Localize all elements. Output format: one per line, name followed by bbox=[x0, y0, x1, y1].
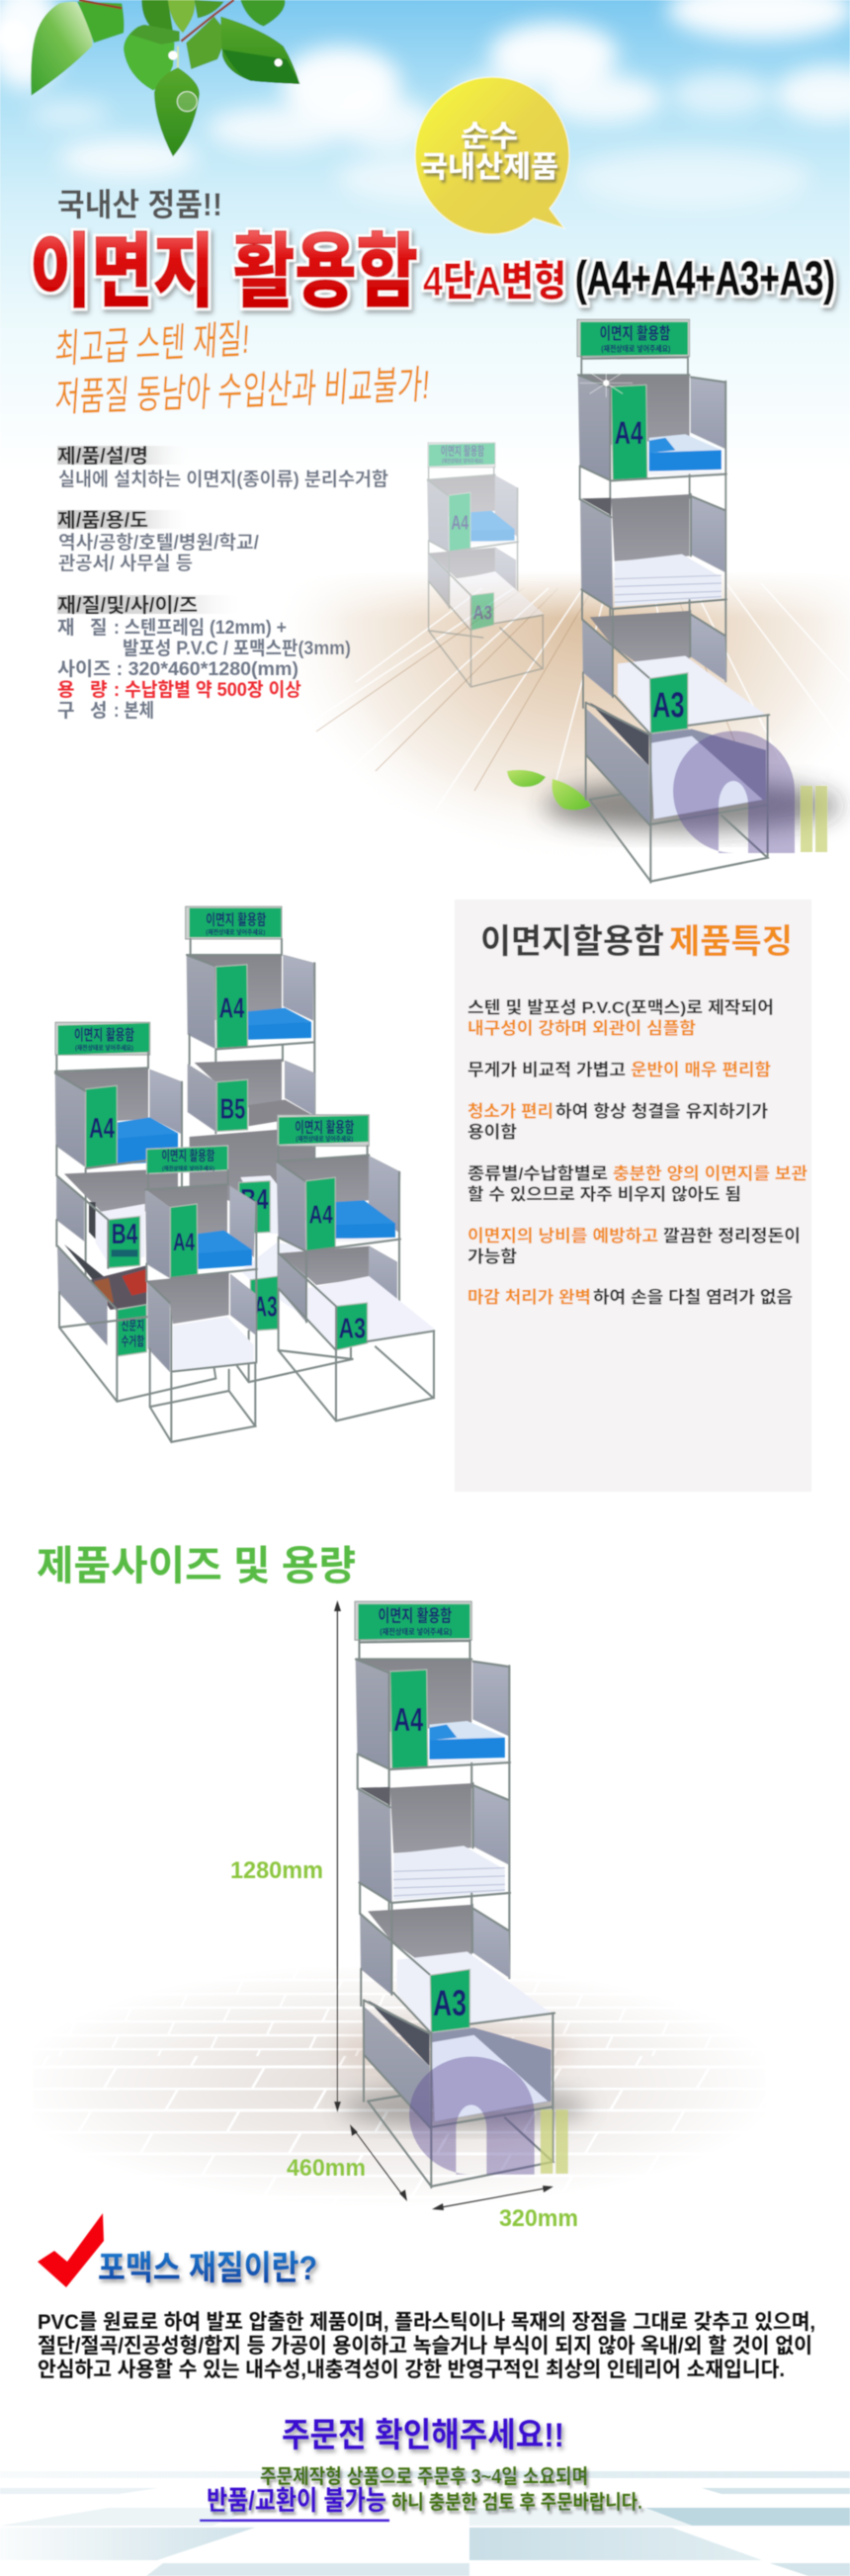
icon: main four-tier rack: 이면지 활용함 bbox=[600, 324, 671, 343]
text block: feature list: 가능함 bbox=[468, 1247, 517, 1266]
text block: feature list: 충분한 양의 이면지를 보관 bbox=[613, 1164, 808, 1183]
icon: ghosted two-tier rack: A4 bbox=[451, 512, 468, 535]
text block: material and size: : 수납함별 약 500장 이상 bbox=[114, 679, 301, 701]
text block: order notice bbox=[200, 2465, 642, 2522]
icon: front two-tier rack: (재전상태로 넣어주세요) bbox=[162, 1164, 214, 1172]
icon: left tall rack: A4 bbox=[89, 1112, 115, 1144]
text block: Formex description: PVC를 원료로 하여 발포 압출한 제품이며, 플라스틱이나 목재의 장점을 그대로 갖추고 있으며, bbox=[38, 2311, 815, 2334]
icon: ghosted two-tier rack bbox=[427, 443, 544, 687]
heading: what is Formex: 포맥스 재질이란? bbox=[98, 2250, 317, 2287]
text block: material and size: 사이즈 : 320*460*1280(mm) bbox=[57, 658, 298, 680]
text block: feature list: 마감 처리가 완벽 bbox=[468, 1288, 591, 1307]
icon: main four-tier rack: A4 bbox=[615, 415, 643, 451]
text block: feature list: 깔끔한 정리정돈이 bbox=[663, 1227, 801, 1245]
icon: back tall rack: 이면지 활용함 bbox=[206, 911, 266, 929]
icon: ghosted two-tier rack: A3 bbox=[472, 602, 492, 625]
icon: front two-tier rack: A4 bbox=[173, 1229, 195, 1256]
icon: back tall rack: A3 bbox=[254, 1291, 278, 1323]
heading: features title bbox=[480, 923, 793, 961]
watermark: purple logo over hero rack bbox=[673, 731, 827, 853]
heading: please check before ordering: 주문전 확인해주세요!! bbox=[282, 2417, 564, 2454]
title: main product name: 이면지 활용함 bbox=[30, 227, 418, 317]
icon: red check mark bbox=[38, 2213, 104, 2287]
callout: yellow speech bubble with domestic product label: 순수 bbox=[461, 121, 518, 153]
icon: ghosted two-tier rack: 이면지 활용함 bbox=[441, 444, 484, 459]
text block: product uses: 제/품/용/도 bbox=[57, 509, 148, 532]
text block: feature list: 이면지의 낭비를 예방하고 bbox=[468, 1227, 658, 1245]
icon: main four-tier rack: (재전상태로 넣어주세요) bbox=[601, 343, 671, 353]
heading: features title: 제품특징 bbox=[669, 923, 793, 961]
text block: order notice: 반품/교환이 불가능 bbox=[207, 2486, 386, 2516]
icon: dimensioned four-tier rack: (재전상태로 넣어주세요) bbox=[380, 1626, 452, 1637]
text block: product description: 제/품/설/명 bbox=[57, 445, 148, 468]
text block: Formex description: 절단/절곡/진공성형/합지 등 가공이 용이하고 녹슬거나 부식이 되지 않아 옥내/외 할 것이 없이 bbox=[38, 2335, 812, 2358]
panel: product features bbox=[455, 900, 811, 1492]
text block: width label: 320mm bbox=[499, 2205, 578, 2232]
text block: material and size: 재 bbox=[57, 617, 74, 639]
icon: dimensioned four-tier rack bbox=[355, 1601, 554, 2188]
text block: material and size: 구 bbox=[57, 701, 74, 722]
panel: sky and wood floor hero background bbox=[0, 0, 850, 890]
icon: small green leaves on floor bbox=[507, 770, 591, 810]
text block: product uses: 관공서/ 사무실 등 bbox=[58, 553, 193, 574]
watermark: purple logo over size rack bbox=[409, 2057, 568, 2175]
icon: right two-tier rack: A4 bbox=[309, 1201, 333, 1230]
icon: main four-tier rack: A3 bbox=[652, 687, 685, 726]
text block: material and size: 용 bbox=[57, 680, 74, 701]
icon: left tall rack: 이면지 활용함 bbox=[74, 1026, 134, 1044]
icon: ghosted two-tier rack: (재전상태로 넣어주세요) bbox=[442, 457, 483, 465]
heading: features title: 이면지할용함 bbox=[480, 923, 664, 961]
icon: right two-tier rack: (재전상태로 넣어주세요) bbox=[296, 1135, 353, 1143]
text block: depth label: 460mm bbox=[287, 2155, 366, 2182]
arrow: width dimension bbox=[432, 2186, 553, 2210]
icon: left tall rack bbox=[55, 1022, 215, 1402]
panel: brick floor background bbox=[81, 1976, 710, 2200]
text block: feature list: 하여 항상 청결을 유지하기가 bbox=[555, 1102, 768, 1121]
text block: material and size: 질 bbox=[90, 617, 107, 639]
text block: feature list: 하여 손을 다칠 염려가 없음 bbox=[593, 1288, 793, 1307]
text block: order notice: 하니 충분한 검토 후 주문바랍니다. bbox=[391, 2491, 642, 2514]
text block: feature list: 운반이 매우 편리함 bbox=[631, 1061, 771, 1079]
icon: left tall rack: 신문지 bbox=[122, 1319, 144, 1333]
icon: back tall rack: (재전상태로 넣어주세요) bbox=[206, 928, 265, 936]
heading: product size and capacity: 제품사이즈 및 용량 bbox=[37, 1543, 356, 1589]
text block: feature list: 스텐 및 발포성 P.V.C(포맥스)로 제작되어 bbox=[468, 998, 774, 1017]
text block: material and size: : 본체 bbox=[114, 700, 154, 722]
arrow: height dimension bbox=[334, 1600, 341, 2112]
text block: feature list: 내구성이 강하며 외관이 심플함 bbox=[468, 1019, 696, 1038]
text block: material and size: 성 bbox=[90, 700, 107, 722]
text block: handwritten orange slogan bbox=[53, 318, 431, 420]
title: main product name: 4단A변형 bbox=[423, 258, 566, 304]
icon: left tall rack: B4 bbox=[112, 1218, 138, 1249]
icon: back tall rack: B5 bbox=[220, 1093, 245, 1125]
callout: yellow speech bubble with domestic product label: 국내산제품 bbox=[420, 151, 558, 184]
text block: height label: 1280mm bbox=[230, 1857, 323, 1884]
text block: product description bbox=[57, 445, 388, 490]
text block: product description: 실내에 설치하는 이면지(종이류) 분리수거함 bbox=[58, 469, 388, 490]
text block: material and size: 량 bbox=[90, 679, 107, 701]
icon: back tall rack: B4 bbox=[240, 1183, 269, 1215]
text block: Formex description bbox=[38, 2311, 815, 2381]
text block: product uses bbox=[57, 509, 260, 574]
icon: front two-tier rack: 이면지 활용함 bbox=[161, 1149, 214, 1163]
icon: left tall rack: 수거함 bbox=[122, 1333, 144, 1349]
icon: front two-tier rack bbox=[145, 1146, 257, 1442]
chart: group of product line-up racks bbox=[55, 906, 435, 1442]
icon: right two-tier rack bbox=[277, 1115, 435, 1420]
text block: feature list: 청소가 편리 bbox=[468, 1102, 553, 1121]
title: main product name bbox=[30, 227, 835, 317]
callout: yellow speech bubble with domestic product label bbox=[415, 77, 569, 234]
text block: handwritten orange slogan: 저품질 동남아 수입산과 비교불가! bbox=[53, 364, 431, 420]
text block: product uses: 역사/공항/호텔/병원/학교/ bbox=[58, 532, 260, 554]
text block: Formex description: 안심하고 사용할 수 있는 내수성,내충격성이 강한 반영구적인 최상의 인테리어 소재입니다. bbox=[38, 2359, 785, 2381]
text block: material and size bbox=[57, 594, 351, 722]
icon: checked tile floor bbox=[0, 2471, 850, 2576]
icon: main four-tier rack bbox=[577, 319, 769, 883]
icon: left tall rack: (재전상태로 넣어주세요) bbox=[75, 1044, 133, 1052]
heading: domestic genuine product: 국내산 정품!! bbox=[57, 187, 222, 222]
icon: dimensioned four-tier rack: A4 bbox=[393, 1701, 423, 1738]
arrow: depth dimension bbox=[350, 2124, 407, 2201]
icon: back tall rack: A4 bbox=[219, 991, 245, 1023]
text block: feature list: 종류별/수납함별로 bbox=[468, 1164, 608, 1183]
text block: feature list: 무게가 비교적 가볍고 bbox=[468, 1061, 626, 1079]
text block: feature list: 용이함 bbox=[468, 1123, 517, 1142]
text block: order notice: 주문제작형 상품으로 주문후 3~4일 소요되며 bbox=[260, 2465, 588, 2488]
icon: right two-tier rack: 이면지 활용함 bbox=[295, 1119, 354, 1137]
text block: material and size: 재/질/및/사/이/즈 bbox=[57, 594, 198, 617]
text block: handwritten orange slogan: 최고급 스텐 재질! bbox=[54, 318, 251, 372]
text block: feature list bbox=[468, 998, 808, 1307]
icon: leafy branch with water drop bbox=[0, 0, 299, 156]
text block: material and size: : 스텐프레임 (12mm) + bbox=[114, 617, 287, 639]
icon: dimensioned four-tier rack: A3 bbox=[433, 1982, 467, 2023]
icon: dimensioned four-tier rack: 이면지 활용함 bbox=[379, 1606, 452, 1626]
text block: feature list: 할 수 있으므로 자주 비우지 않아도 됨 bbox=[468, 1185, 741, 1204]
icon: right two-tier rack: A3 bbox=[339, 1313, 366, 1344]
text block: material and size: 발포성 P.V.C / 포맥스판(3mm) bbox=[123, 638, 351, 659]
icon: back tall rack bbox=[186, 906, 353, 1382]
